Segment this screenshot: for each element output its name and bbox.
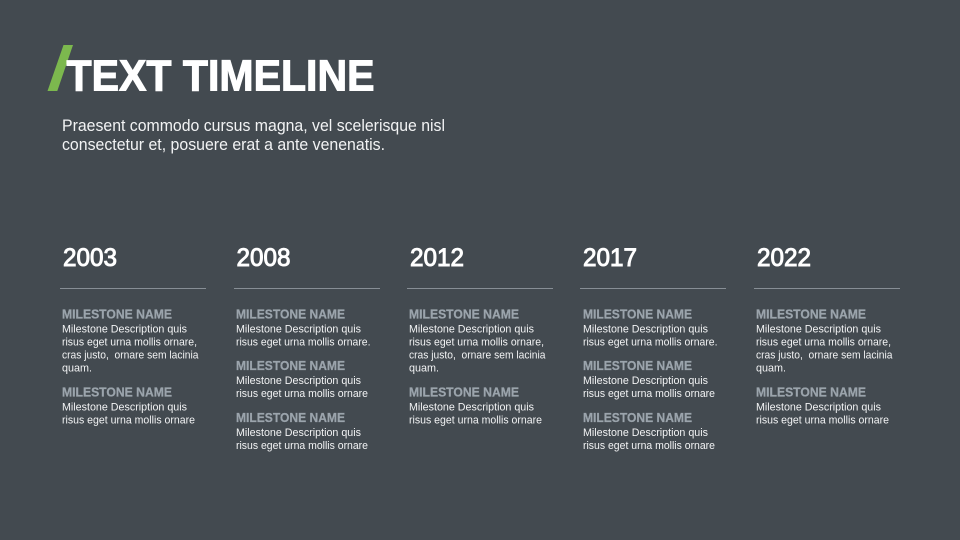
panel: 2022 <box>754 244 900 426</box>
milestone 2: MILESTONE NAME <box>409 386 519 400</box>
panel: 2017 <box>580 244 726 452</box>
subtitle: consectetur et, posuere erat a ante venenatis. <box>62 135 385 154</box>
milestone 2: Milestone Description quis <box>62 402 187 414</box>
subtitle: Praesent commodo cursus magna, vel scelerisque nisl <box>62 116 445 135</box>
milestone 3: MILESTONE NAME <box>583 411 692 425</box>
milestone 3: risus eget urna mollis ornare <box>583 440 715 452</box>
milestone 1: MILESTONE NAME <box>62 308 172 322</box>
milestone 1 <box>236 308 370 348</box>
milestone 1: risus eget urna mollis ornare. <box>236 336 370 348</box>
milestone 1: MILESTONE NAME <box>236 308 345 322</box>
milestone 1: quam. <box>409 362 439 374</box>
milestone 2: MILESTONE NAME <box>583 359 692 373</box>
year: 2022: 2022 <box>757 244 811 272</box>
milestone 2 <box>583 359 715 400</box>
milestone 1: MILESTONE NAME <box>756 308 866 322</box>
year: 2012: 2012 <box>410 244 464 272</box>
milestone 1: risus eget urna mollis ornare, <box>409 336 544 348</box>
milestone 2: risus eget urna mollis ornare <box>756 414 889 426</box>
milestone 1: Milestone Description quis <box>409 324 534 336</box>
milestone 2: Milestone Description quis <box>756 402 881 414</box>
milestone 1: quam. <box>756 362 786 374</box>
milestone 2: Milestone Description quis <box>409 402 534 414</box>
milestone 1: cras justo, ornare sem lacinia <box>409 350 546 362</box>
milestone 2 <box>236 359 368 400</box>
year: 2003: 2003 <box>63 244 117 272</box>
milestone 2 <box>62 386 195 426</box>
panel: 2012 <box>407 244 553 426</box>
milestone 2: risus eget urna mollis ornare <box>236 388 368 400</box>
milestone 1: Milestone Description quis <box>583 324 708 336</box>
milestone 1: cras justo, ornare sem lacinia <box>62 350 199 362</box>
milestone 1: risus eget urna mollis ornare, <box>756 336 891 348</box>
milestone 1: Milestone Description quis <box>62 324 187 336</box>
milestone 3: MILESTONE NAME <box>236 411 345 425</box>
milestone 1: Milestone Description quis <box>236 324 361 336</box>
milestone 1 <box>756 308 893 374</box>
milestone 1: risus eget urna mollis ornare. <box>583 336 718 348</box>
milestone 2: Milestone Description quis <box>583 375 708 387</box>
milestone 2: risus eget urna mollis ornare <box>62 414 195 426</box>
icon: green slash <box>48 45 73 91</box>
milestone 3: risus eget urna mollis ornare <box>236 440 368 452</box>
milestone 2 <box>756 386 889 426</box>
milestone 1: MILESTONE NAME <box>583 308 692 322</box>
milestone 3 <box>236 411 368 452</box>
milestone 2: MILESTONE NAME <box>756 386 866 400</box>
year: 2008: 2008 <box>236 244 290 272</box>
milestone 1: Milestone Description quis <box>756 324 881 336</box>
panel: 2008 <box>234 244 380 452</box>
milestone 1: risus eget urna mollis ornare, <box>62 336 197 348</box>
milestone 1 <box>62 308 199 374</box>
milestone 2: Milestone Description quis <box>236 375 361 387</box>
milestone 2 <box>409 386 542 426</box>
milestone 1: quam. <box>62 362 92 374</box>
panel: 2003 <box>60 244 206 426</box>
milestone 3: Milestone Description quis <box>583 427 708 439</box>
milestone 1: cras justo, ornare sem lacinia <box>756 350 893 362</box>
milestone 1 <box>409 308 546 374</box>
year: 2017: 2017 <box>583 244 637 272</box>
milestone 2: risus eget urna mollis ornare <box>583 388 715 400</box>
milestone 2: risus eget urna mollis ornare <box>409 414 542 426</box>
milestone 3 <box>583 411 715 452</box>
title: TEXT TIMELINE <box>66 52 374 100</box>
milestone 3: Milestone Description quis <box>236 427 361 439</box>
milestone 2: MILESTONE NAME <box>236 359 345 373</box>
milestone 1 <box>583 308 718 348</box>
milestone 2: MILESTONE NAME <box>62 386 172 400</box>
milestone 1: MILESTONE NAME <box>409 308 519 322</box>
subtitle <box>62 116 445 154</box>
